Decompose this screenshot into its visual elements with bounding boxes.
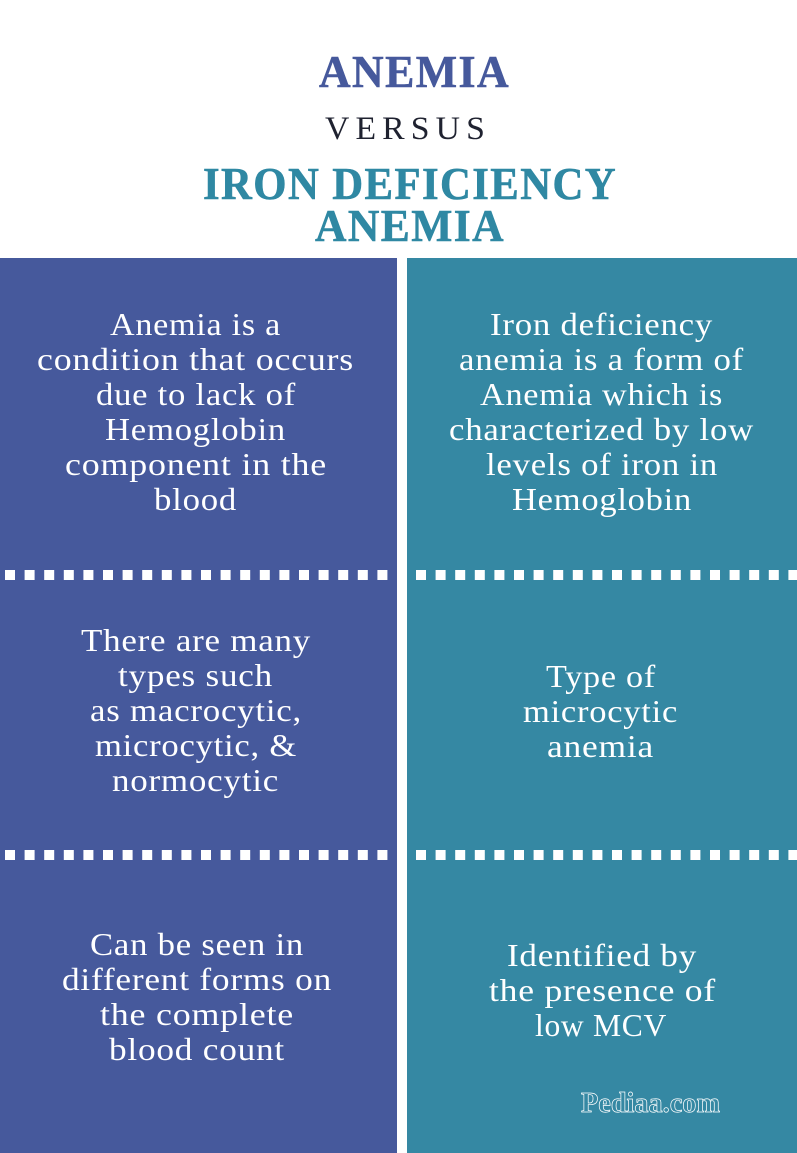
text: anemia definition: due to lack of xyxy=(96,376,296,412)
logo: Pediaa.com: Pediaa.com xyxy=(581,1088,720,1119)
text: anemia definition: component in the xyxy=(65,446,327,482)
title: Iron Deficiency Anemia: IRON DEFICIENCY xyxy=(203,158,617,209)
text: iron deficiency anemia type: Type of xyxy=(546,658,656,694)
text: anemia blood count: different forms on xyxy=(62,961,332,997)
text: iron deficiency anemia definition: Anemia which is xyxy=(480,376,723,412)
subtitle: versus: VERSUS xyxy=(325,111,491,147)
title: Anemia: ANEMIA xyxy=(319,46,510,97)
text: anemia blood count: blood count xyxy=(109,1031,285,1067)
title: Iron Deficiency Anemia: ANEMIA xyxy=(315,200,505,251)
text: iron deficiency anemia definition: characterized by low xyxy=(449,411,754,447)
text: anemia blood count: Can be seen in xyxy=(90,926,304,962)
text: anemia types: normocytic xyxy=(112,762,279,798)
text: anemia definition xyxy=(37,306,354,517)
text: anemia types: There are many xyxy=(81,622,311,658)
panel: anemia column xyxy=(0,258,397,1153)
panel: iron deficiency anemia column xyxy=(407,258,797,1153)
text: iron deficiency anemia type xyxy=(523,658,678,764)
text: anemia definition: condition that occurs xyxy=(37,341,354,377)
text: iron deficiency anemia definition: Iron deficiency xyxy=(490,306,713,342)
text: iron deficiency anemia type: microcytic xyxy=(523,693,678,729)
text: anemia blood count xyxy=(62,926,332,1067)
text: iron deficiency anemia identification: the presence of xyxy=(489,972,716,1008)
text: iron deficiency anemia identification: Identified by xyxy=(507,937,697,973)
text: iron deficiency anemia identification xyxy=(489,937,716,1043)
title: Iron Deficiency Anemia xyxy=(203,158,617,251)
text: iron deficiency anemia definition: levels of iron in xyxy=(486,446,718,482)
text: anemia types: as macrocytic, xyxy=(90,692,302,728)
text: anemia definition: Anemia is a xyxy=(110,306,281,342)
text: iron deficiency anemia identification: low MCV xyxy=(535,1007,667,1043)
text: anemia types xyxy=(81,622,311,798)
text: anemia types: microcytic, & xyxy=(95,727,297,763)
text: iron deficiency anemia definition: anemia is a form of xyxy=(459,341,744,377)
text: iron deficiency anemia type: anemia xyxy=(547,728,654,764)
text: anemia types: types such xyxy=(118,657,273,693)
text: anemia definition: blood xyxy=(154,481,237,517)
text: iron deficiency anemia definition: Hemoglobin xyxy=(512,481,692,517)
text: iron deficiency anemia definition xyxy=(449,306,754,517)
text: anemia blood count: the complete xyxy=(100,996,294,1032)
text: anemia definition: Hemoglobin xyxy=(105,411,286,447)
